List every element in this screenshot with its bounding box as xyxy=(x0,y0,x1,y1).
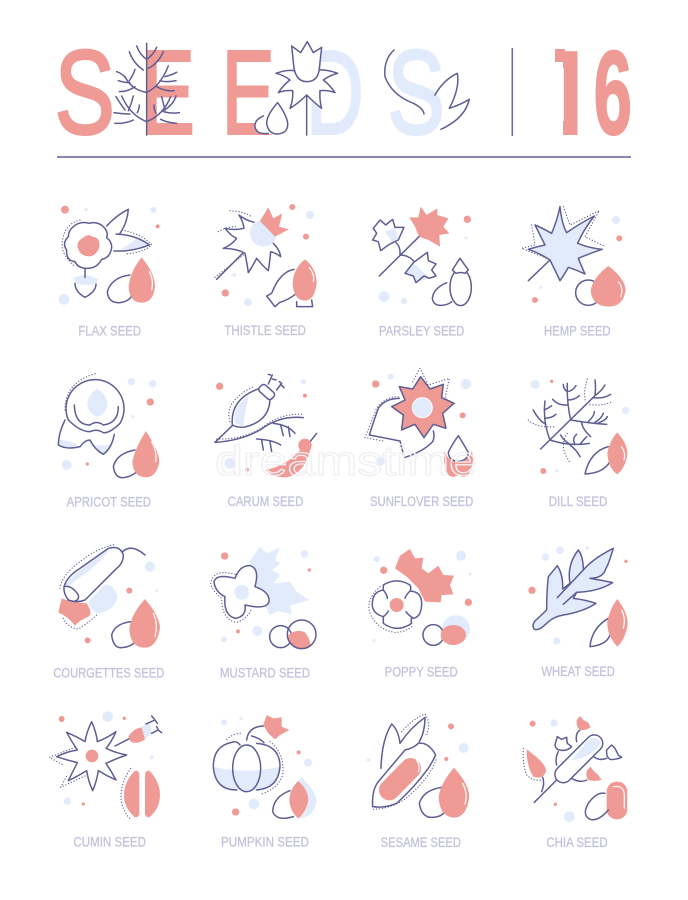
label: courgettes seed: COURGETTES SEED xyxy=(53,664,164,680)
panel: mustard seed xyxy=(211,547,316,680)
panel: carum seed xyxy=(215,374,317,509)
panel: sesame seed xyxy=(367,714,469,850)
label: chia seed: CHIA SEED xyxy=(546,834,608,850)
icon: title thistle plant xyxy=(255,42,469,135)
panel: parsley seed xyxy=(373,207,471,339)
label: hemp seed: HEMP SEED xyxy=(544,323,611,339)
title: SEEDS 16 xyxy=(58,40,630,136)
panel: poppy seed xyxy=(369,549,472,680)
label: mustard seed: MUSTARD SEED xyxy=(220,664,310,680)
panel: flax seed xyxy=(59,206,160,339)
label: parsley seed: PARSLEY SEED xyxy=(379,323,464,339)
label: thistle seed: THISTLE SEED xyxy=(224,322,306,338)
label: cumin seed: CUMIN SEED xyxy=(73,834,146,850)
label: carum seed: CARUM SEED xyxy=(228,493,303,509)
title rule xyxy=(57,156,631,158)
panel: hemp seed xyxy=(522,207,626,339)
title letter D: D xyxy=(306,26,364,160)
panel: sunflower seed xyxy=(365,368,473,509)
panel: apricot seed xyxy=(58,373,159,510)
title letter E second: E xyxy=(222,26,275,160)
panel: thistle seed xyxy=(215,204,317,338)
panel: courgettes seed xyxy=(53,544,164,680)
label: sunflower seed: SUNFLOVER SEED xyxy=(370,493,473,509)
title letter S: S xyxy=(55,26,115,160)
title vertical divider xyxy=(512,48,513,136)
label: wheat seed: WHEAT SEED xyxy=(541,663,615,679)
label: pumpkin seed: PUMPKIN SEED xyxy=(221,834,309,850)
title letter S pale: S xyxy=(388,26,445,160)
panel: cumin seed xyxy=(49,711,162,850)
label: dill seed: DILL SEED xyxy=(549,493,607,509)
label: apricot seed: APRICOT SEED xyxy=(67,494,151,510)
watermark: dreamstime xyxy=(215,437,477,484)
label: poppy seed: POPPY SEED xyxy=(385,664,458,680)
label: sesame seed: SESAME SEED xyxy=(381,834,461,850)
title letter E: E xyxy=(142,26,195,160)
icon: title dill plant xyxy=(114,43,179,135)
panel: chia seed xyxy=(523,716,627,850)
label: flax seed: FLAX SEED xyxy=(78,323,141,339)
title number 1 xyxy=(555,49,578,135)
title number 1: 1 xyxy=(540,27,599,160)
panel: wheat seed xyxy=(528,546,628,679)
panel: pumpkin seed xyxy=(213,715,317,850)
title number 6: 6 xyxy=(594,27,632,160)
panel: dill seed xyxy=(528,379,629,509)
